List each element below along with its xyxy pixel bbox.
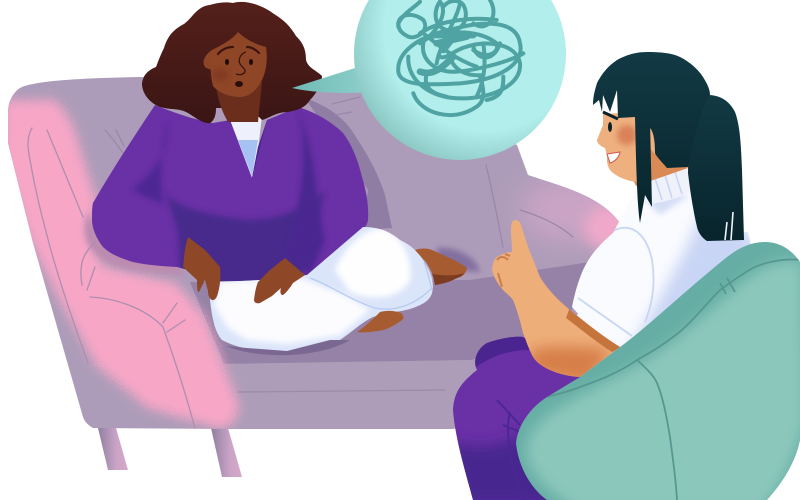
collar (636, 168, 692, 204)
woman on sofa (85, 2, 480, 357)
cheek blush (617, 125, 637, 145)
sofa body (0, 70, 640, 435)
white top (572, 192, 751, 346)
chair seams (547, 259, 800, 500)
face (597, 112, 646, 182)
sleeve shadow on arm (85, 212, 185, 276)
purple sweater (92, 105, 368, 281)
purple trousers (453, 336, 580, 500)
chair main surface (527, 261, 800, 500)
sweater dark belly (165, 190, 325, 285)
sofa legs (98, 428, 242, 477)
collar ribs (655, 172, 682, 200)
sofa (0, 70, 640, 477)
foot lower (357, 311, 403, 332)
under arm band (566, 307, 622, 352)
forearm shading (530, 346, 610, 385)
hair (142, 2, 322, 123)
trousers dark top (475, 336, 530, 368)
white trousers (210, 227, 433, 351)
pink glow on sofa back (520, 178, 630, 242)
ponytail (688, 95, 744, 241)
teal armchair (510, 235, 800, 500)
foot right lower shade (432, 273, 464, 285)
raised hand and forearm (492, 220, 620, 377)
head hair (593, 52, 710, 223)
sofa front panel (453, 428, 456, 429)
eye and eyebrow (603, 112, 618, 132)
ponytail slits (725, 212, 733, 240)
face details (218, 47, 259, 87)
tangled scribble (398, 0, 523, 115)
cheek blush (212, 69, 228, 81)
foot shadow (436, 248, 480, 272)
bubble circle (354, 0, 566, 160)
top blue shade (238, 140, 258, 176)
sweater folds (133, 129, 168, 204)
top under sweater (226, 116, 262, 178)
sofa back (0, 70, 640, 435)
trouser shadow on seat (226, 340, 350, 355)
pink arm highlight (2, 100, 238, 428)
neck (216, 82, 262, 122)
foot right (415, 248, 467, 285)
hand right (254, 258, 305, 303)
bubble tail (292, 68, 370, 93)
finger lines (497, 254, 510, 287)
speech bubble (292, 0, 566, 160)
sofa seat (190, 262, 590, 364)
therapist (445, 52, 800, 500)
arm seams (28, 128, 195, 428)
shadow beside sweater (305, 98, 392, 230)
neck (630, 120, 688, 186)
sofa back seams (105, 97, 573, 392)
ears (204, 50, 212, 70)
trousers dark bottom (457, 432, 547, 500)
hand left (183, 237, 220, 300)
face (211, 32, 267, 97)
mouth (607, 152, 620, 163)
trousers fold lines (496, 400, 520, 444)
ear (645, 126, 656, 154)
